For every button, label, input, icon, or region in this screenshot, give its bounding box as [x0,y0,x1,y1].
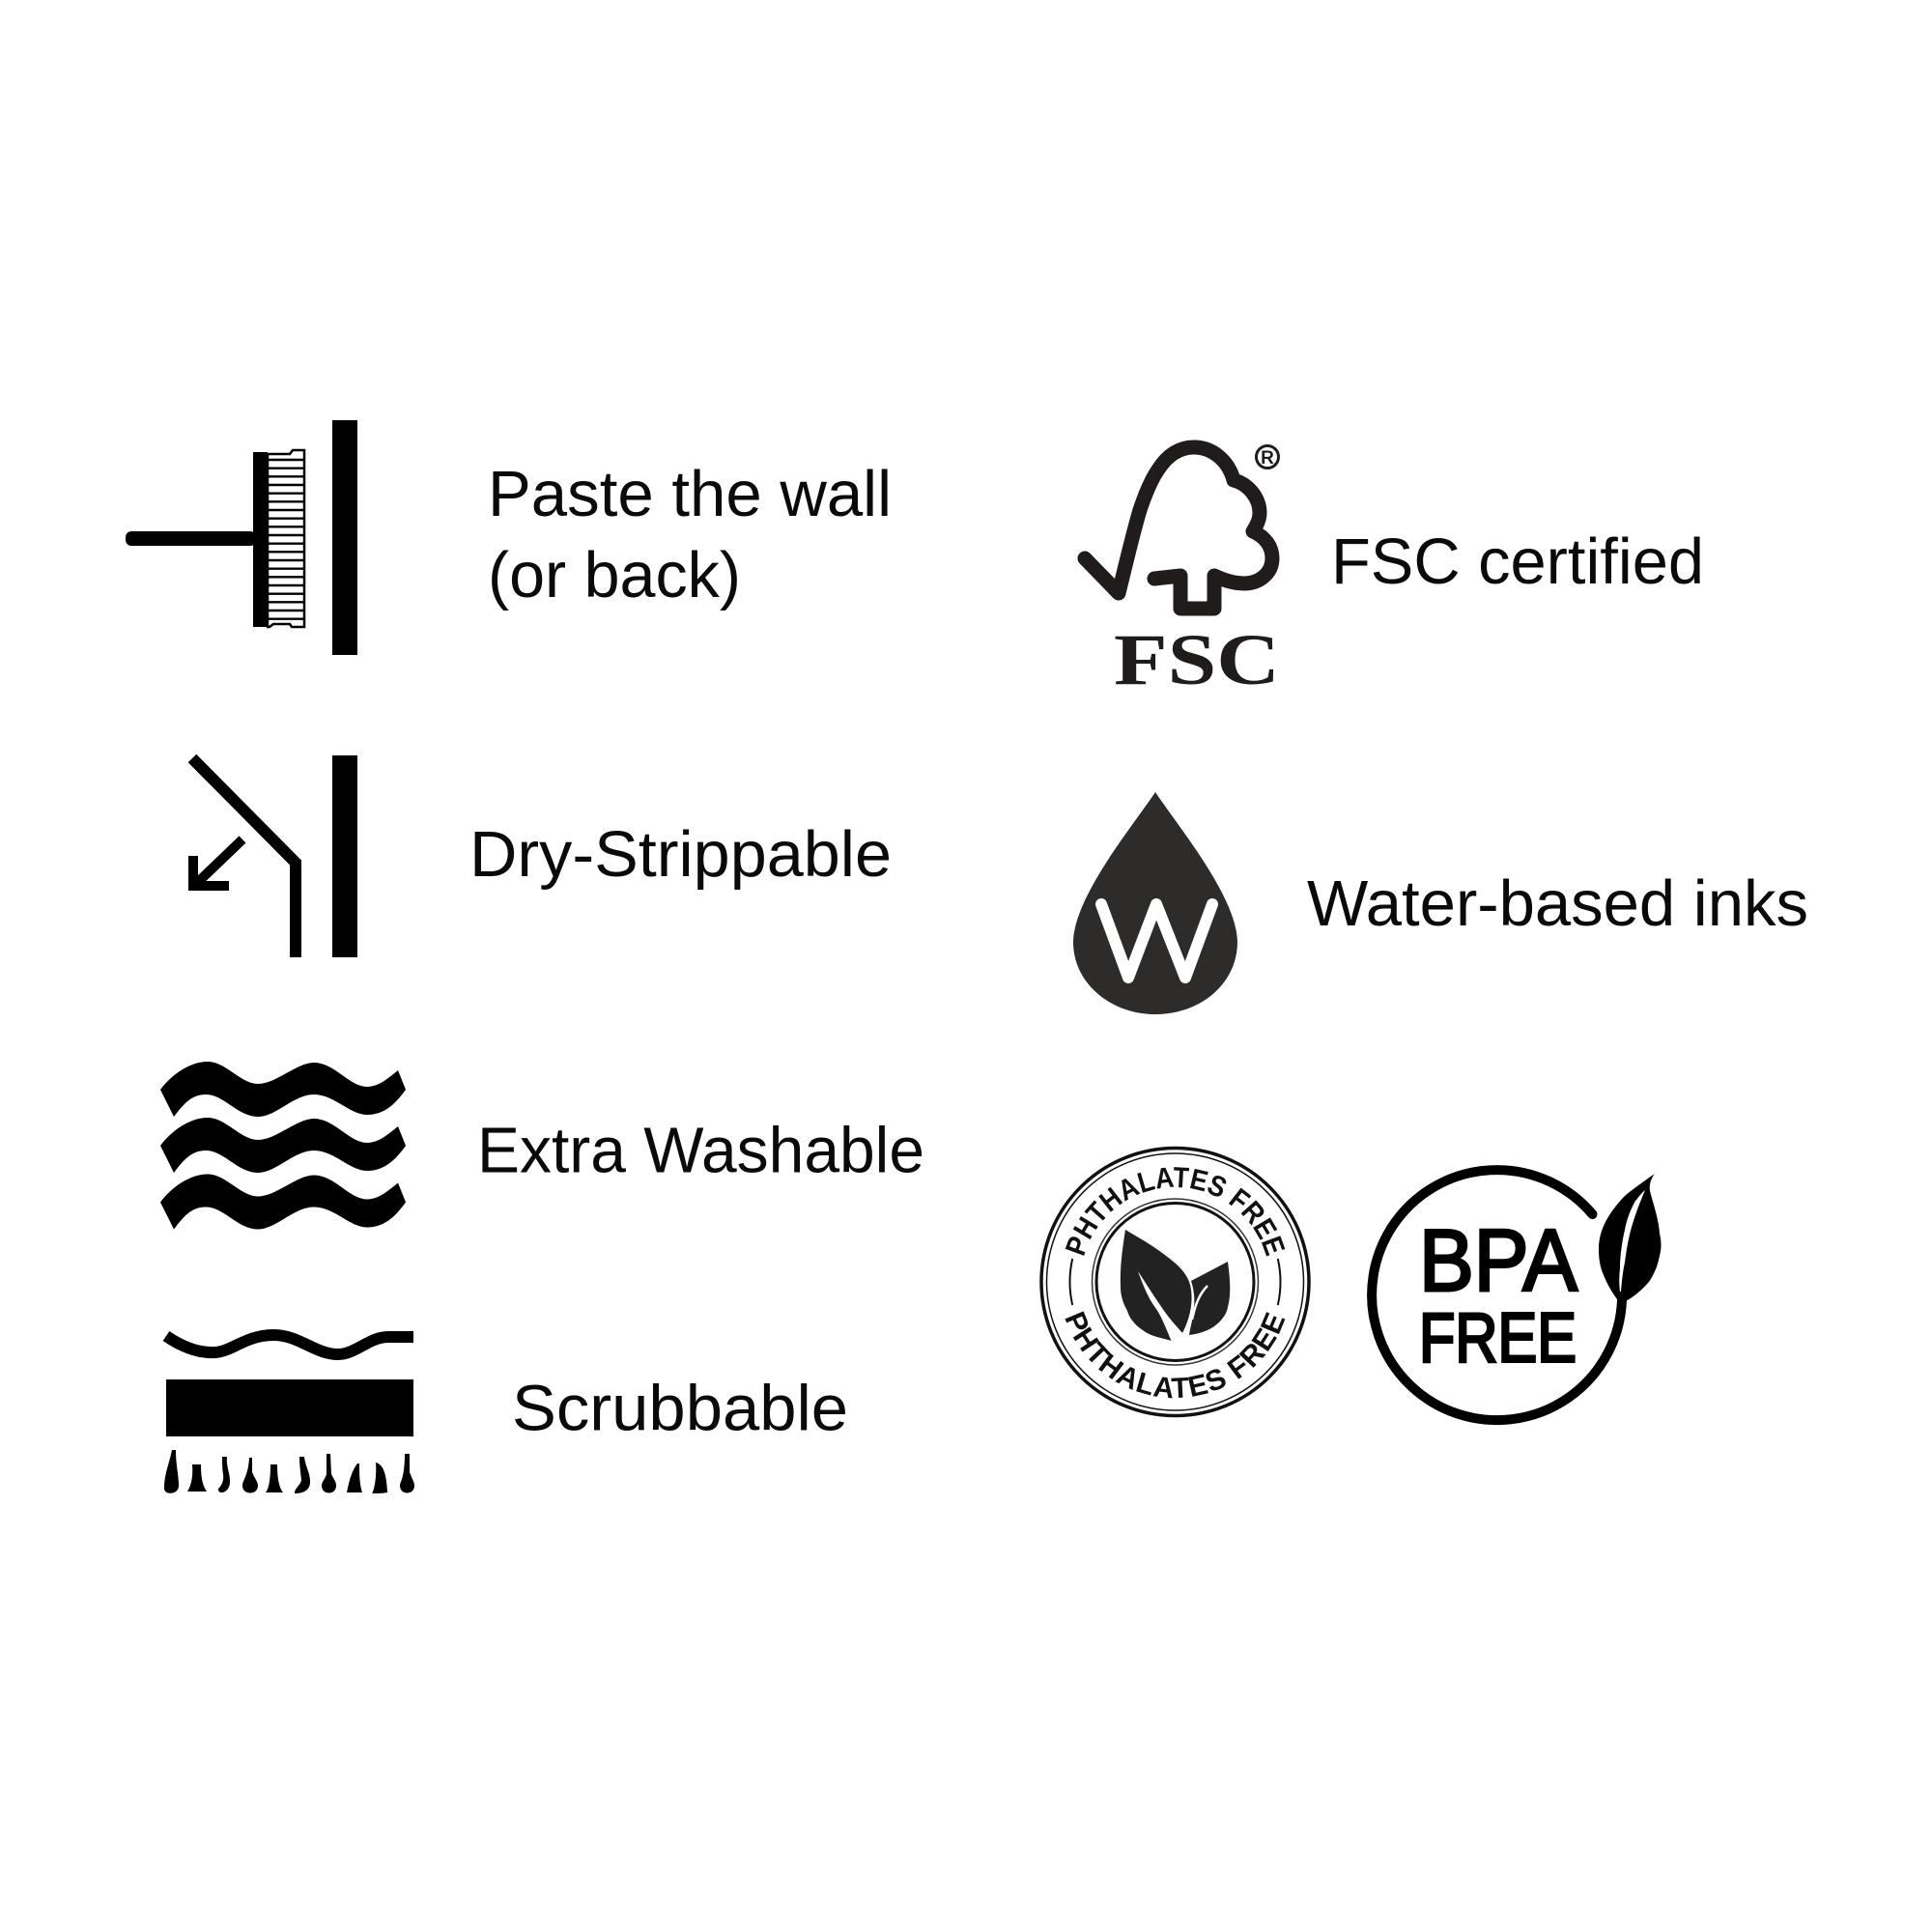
panel: scrubbable [164,1335,848,1493]
icon: FSC tree logo [1085,446,1280,700]
panel: extra washable [160,1062,924,1229]
icon: peeling strip and wall [192,755,357,957]
panel: paste the wall [126,420,892,655]
panel: dry-strippable [192,755,892,957]
icon: two leaves [1121,1230,1230,1342]
icon: FSC tree logo: FSC [1114,620,1280,700]
badge: BPA free [1372,1170,1662,1420]
icon: water drop with W [1073,792,1237,1014]
text: or back: (or back) [488,539,741,611]
badge: phthalates free [1039,1146,1311,1418]
text: phthalates free, bottom arc: PHTHALATES FREE [1065,1311,1285,1399]
icon: open ring [1372,1170,1622,1420]
text: phthalates free, top arc: PHTHALATES FREE [1065,1167,1285,1256]
icon: FSC tree logo: R [1261,448,1274,469]
text: FSC certified: FSC certified [1331,526,1704,598]
text: FREE: FREE [1419,1300,1577,1378]
text: BPA: BPA [1419,1212,1577,1310]
text: paste the wall: Paste the wall [488,458,892,530]
panel: water-based inks [1073,792,1808,1014]
text: dry-strippable: Dry-Strippable [469,818,892,891]
text: water-based inks: Water-based inks [1307,867,1808,940]
text: extra washable: Extra Washable [477,1115,924,1186]
icon: paste brush and wall [126,420,357,655]
panel: FSC certified [1085,446,1704,700]
icon: brush wave, block and drips [164,1335,414,1493]
icon: three waves [160,1062,406,1229]
text: scrubbable: Scrubbable [512,1372,848,1445]
icon: leaf [1599,1174,1662,1303]
